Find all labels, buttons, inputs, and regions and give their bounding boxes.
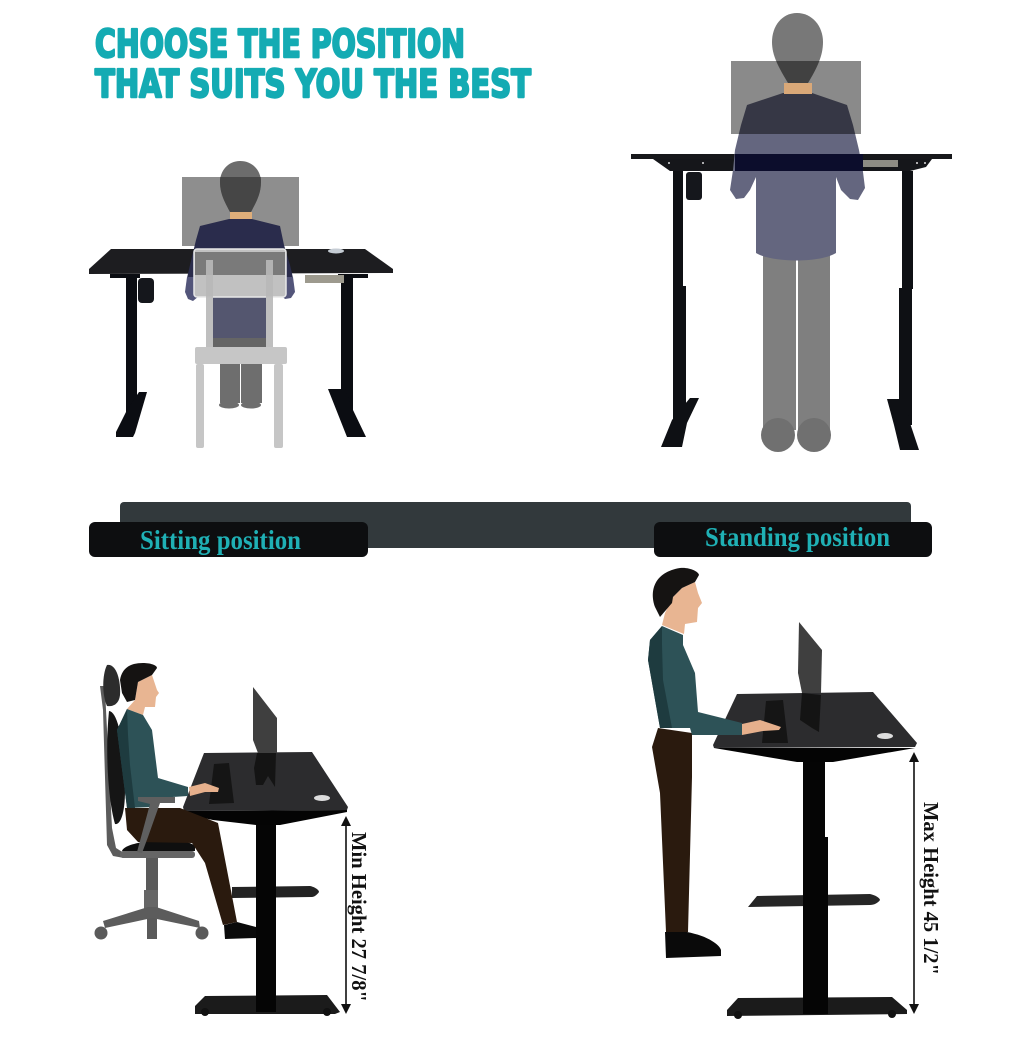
shoe [224,922,256,939]
panel: standing desk rear view [631,13,952,452]
face and neck [127,675,159,715]
desk rear foot [748,894,880,907]
desk rear foot [232,886,319,898]
desk top [89,249,393,274]
cable port [328,248,344,254]
trousers [652,728,692,932]
chair seat and legs [195,347,287,448]
monitor [798,622,822,693]
lower arms [185,277,295,301]
keyboard [209,763,234,804]
person torso and arms [730,93,865,260]
desk leg [256,825,276,997]
arrow: max height [909,752,919,1014]
desk frame [653,159,932,171]
motor [138,278,154,303]
chair column [146,858,158,890]
sitting label: Sitting position [140,525,301,555]
desk base [195,995,340,1014]
hand [742,720,781,735]
torso hem shadow [213,338,266,348]
person legs [219,364,262,408]
desk left leg and foot [661,171,699,447]
cable port [314,795,330,801]
shoe [665,932,721,958]
title: THAT SUITS YOU THE BEST [95,62,531,106]
hand [189,783,219,796]
label: max height: Max Height 45 1/2" [919,802,943,975]
person [648,568,781,958]
sweater [648,626,742,735]
panel: sitting desk rear view [89,161,393,448]
chair back [194,249,286,348]
frame bolts [668,162,926,164]
chair lower post [147,912,157,939]
face and neck [662,582,702,634]
sitting label [89,522,368,557]
wheels [734,1010,896,1019]
wheels [201,1008,331,1016]
monitor reflection [800,693,821,732]
monitor [253,687,277,753]
control box [305,275,344,283]
person [117,663,256,939]
label: min height: Min Height 27 7/8" [347,832,371,1002]
sweater [117,709,188,808]
desk left leg and foot [110,274,147,437]
keyboard [762,700,788,743]
motor [686,172,702,200]
torso and arms [187,219,293,278]
base centre [803,997,828,1014]
monitor reflection [254,753,276,787]
desk top [713,692,917,748]
office chair [94,665,208,940]
desk band over torso [735,154,863,171]
trousers [125,808,237,925]
arrow: min height [341,816,351,1014]
title: CHOOSE THE POSITION [95,22,465,66]
hair [120,663,157,702]
desk leg upper [803,762,825,838]
desk underside [714,748,915,762]
chair frame [100,686,124,858]
person feet [761,418,831,452]
cable port [877,733,893,739]
person head [220,161,261,212]
torso lower [213,295,266,340]
neck [784,83,812,94]
head over monitor [220,177,261,212]
panel: standing side view [648,568,943,1019]
back pad [107,711,125,824]
title [95,22,531,106]
desk top [631,154,952,159]
seat [120,851,195,858]
monitor [182,177,299,246]
hair [653,568,699,617]
headrest [103,665,120,706]
chair arm [137,797,175,853]
person legs [763,255,830,430]
standing label [654,522,932,557]
monitor stand base [177,249,304,255]
desk leg lower [803,837,828,1002]
person head [772,13,823,83]
band back [120,502,911,548]
base centre [256,995,276,1012]
desk right leg and foot [887,171,919,450]
standing label: Standing position [705,522,890,552]
chair base [103,907,200,928]
panel: sitting side view [94,663,371,1016]
desk right leg and foot [328,274,368,437]
desk base [727,997,907,1016]
sweater shadow [648,626,672,728]
monitor overlay [731,61,861,134]
label band [89,502,932,557]
desk underside [184,810,347,825]
sweater shadow [117,709,135,808]
desk top [183,752,348,811]
chair wheels [94,926,208,940]
neck [230,212,252,220]
control box [861,160,898,167]
